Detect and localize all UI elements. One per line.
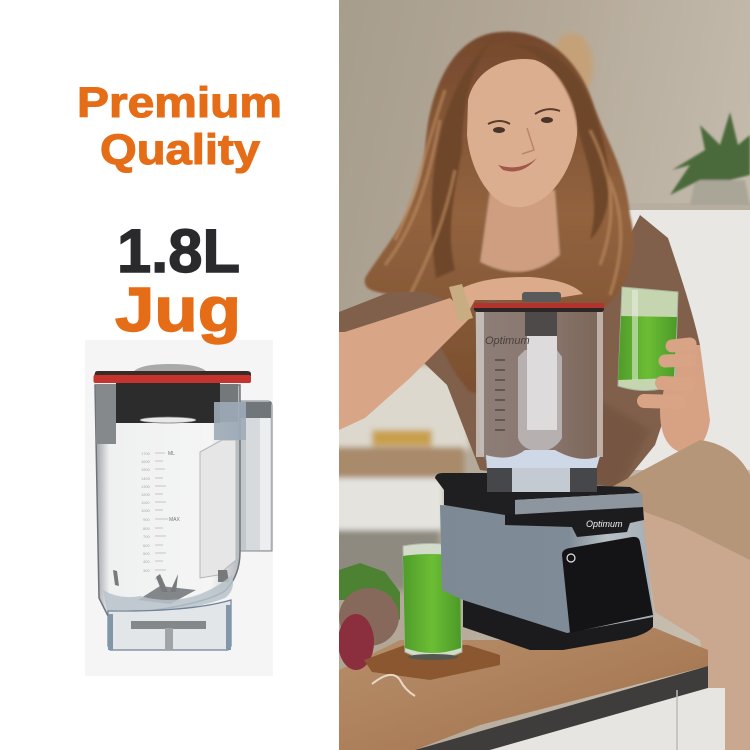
hair highlights: [385, 90, 621, 295]
jug lid: [94, 364, 251, 383]
heading: 1.8L Jug: 1.8L: [117, 217, 240, 285]
white cabinet: [620, 203, 750, 470]
hair front strands: [431, 35, 609, 278]
measurement labels: 700: [143, 534, 150, 539]
panel: jug product image: [85, 340, 273, 676]
face: [467, 59, 577, 207]
measurement labels: 1500: [141, 467, 151, 472]
measurement labels: 1300: [141, 484, 151, 489]
measurement labels: 600: [143, 543, 150, 548]
jug blades: [113, 570, 229, 604]
blender base foot: [463, 600, 653, 650]
jug handle joint: [214, 402, 246, 440]
wooden coaster: [364, 645, 500, 680]
counter dark edge: [415, 666, 708, 750]
wooden counter: [339, 628, 708, 750]
measurement labels: 900: [143, 517, 150, 522]
black logo band: [505, 507, 644, 537]
jug handle: [236, 401, 272, 551]
measurement labels: 1700: [141, 451, 151, 456]
measurement labels: [141, 451, 180, 573]
arm left: [339, 298, 470, 430]
bracelet: [449, 284, 473, 322]
hand on lid: [463, 277, 583, 309]
measurement labels: ML: [168, 451, 175, 457]
jug brand: Optimum: [485, 335, 530, 347]
blender logo: Optimum: [586, 519, 623, 529]
jug inner window: [200, 440, 236, 578]
neck: [480, 190, 560, 272]
twine: [372, 675, 415, 696]
heading: 1.8L Jug: [115, 217, 241, 345]
heading: Premium Quality: [77, 79, 282, 174]
facial features: [488, 109, 560, 172]
jug dark upper band: [116, 383, 220, 423]
panel: lifestyle photo: [330, 0, 750, 750]
torso shirt: [345, 215, 700, 488]
jug body: [95, 385, 240, 616]
measurement labels: 1000: [141, 508, 151, 513]
jug lid red: [474, 303, 604, 312]
hair back: [365, 32, 633, 395]
silver band: [515, 493, 643, 516]
arm right: [660, 345, 710, 452]
decorative wall object: [554, 31, 595, 89]
blender control panel: [562, 537, 653, 633]
vegetables: [338, 563, 400, 670]
heading: Premium Quality: Premium: [77, 79, 282, 127]
measurement scale: [155, 453, 168, 579]
background kitchen: [330, 365, 469, 590]
measurement labels: 1600: [141, 459, 151, 464]
blender base body: [440, 495, 654, 634]
measurement labels: 500: [143, 551, 150, 556]
measurement labels: 1200: [141, 492, 151, 497]
measurement labels: MAX: [169, 517, 180, 523]
panel power icon: [567, 554, 575, 562]
heading: 1.8L Jug: Jug: [115, 276, 241, 345]
clear jug body: [475, 310, 603, 462]
measurement labels: 1400: [141, 476, 151, 481]
blender top plate: [435, 473, 640, 515]
shirt shading: [597, 405, 646, 486]
jug on blender: [474, 292, 604, 492]
heading: Premium Quality: Quality: [100, 126, 260, 174]
plant: [670, 112, 750, 205]
trousers: [610, 440, 750, 750]
sleeve: [339, 292, 445, 332]
measurement labels: 400: [143, 559, 150, 564]
glass on counter: [403, 544, 462, 660]
hand holding glass: [644, 344, 690, 402]
left panel background: [0, 0, 339, 750]
photo wall: [339, 0, 750, 750]
measurement labels: 800: [143, 526, 150, 531]
white lower cabinet: [490, 688, 725, 750]
jug measure marks: [495, 360, 505, 430]
blender: [435, 292, 654, 650]
held glass: [618, 287, 678, 391]
measurement labels: 1100: [141, 500, 150, 505]
jug lower blue: [486, 450, 600, 470]
jug base: [108, 600, 231, 650]
measurement labels: 300: [143, 568, 150, 573]
